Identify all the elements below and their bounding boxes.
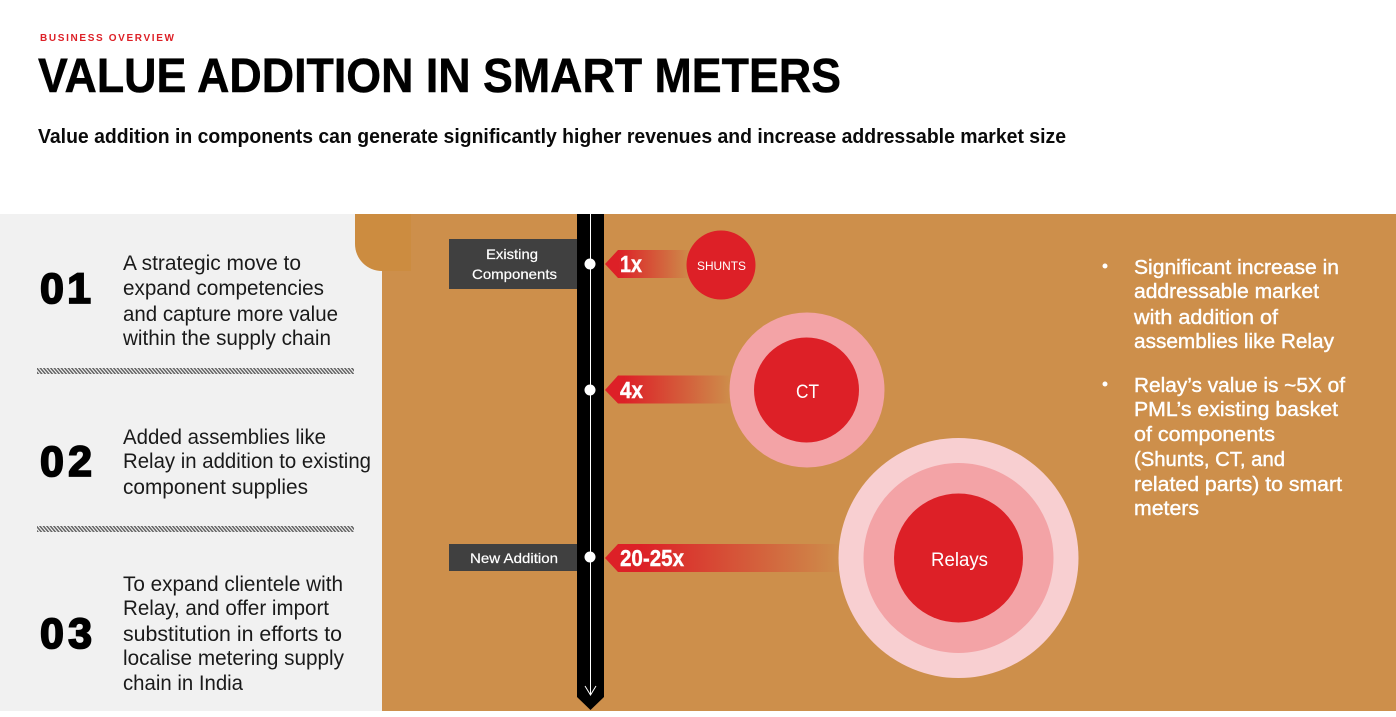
label: existing components [449,239,577,289]
multiplier arrow: 1x: 1x [620,251,642,277]
corner tab [355,214,411,271]
bullet text 1: assemblies like Relay [1134,330,1335,353]
multiplier arrow: 20-25x: 20-25x [620,545,684,571]
point 01: expand competencies [123,277,324,300]
point 02 [40,426,371,499]
label: new addition [449,544,577,571]
label: new addition: New Addition [470,550,558,566]
multiplier arrow: 1x [605,250,692,278]
circle: CT [730,312,884,468]
multiplier arrow: 20-25x [605,544,842,572]
label: existing components: Components [472,266,557,282]
bullet text 2: (Shunts, CT, and [1134,448,1285,471]
bullet text 1: addressable market [1134,280,1319,303]
panel: left points [0,214,382,711]
point 03: To expand clientele with [123,573,343,596]
eyebrow: BUSINESS OVERVIEW [40,33,175,44]
bullet text 2: related parts) to smart [1134,473,1342,496]
point 03 [40,573,344,695]
bullet text 2: meters [1134,497,1199,520]
point 03: 03 [40,610,92,658]
point 03: chain in India [123,672,243,695]
bullet text 1: Significant increase in [1134,256,1339,279]
multiplier arrow: 4x: 4x [620,377,643,403]
circle: shunts [686,230,756,300]
point 01 [40,252,338,350]
circle: shunts: SHUNTS [697,259,746,273]
circle: relays: Relays [931,550,988,571]
point 01: A strategic move to [123,252,301,275]
point 03: substitution in efforts to [123,623,342,646]
bullet text 2: of components [1134,423,1275,446]
bullet text 2: Relay’s value is ~5X of [1134,374,1345,397]
point 03: Relay, and offer import [123,597,329,620]
circle: relays [838,438,1078,678]
title: VALUE ADDITION IN SMART METERS [38,50,841,103]
point 03: localise metering supply [123,647,344,670]
bullet text 2: PML’s existing basket [1134,398,1338,421]
bullet text 2 [1102,374,1345,520]
label: existing components: Existing [486,246,538,262]
subtitle: Value addition in components can generate significantly higher revenues and increase addressable market size [38,125,1066,148]
point 01: within the supply chain [122,327,331,350]
multiplier arrow: 4x [605,376,732,404]
panel: value chart [355,214,1396,711]
bullet text 1: with addition of [1133,306,1278,329]
point 01: 01 [40,265,91,313]
circle: CT: CT [796,382,819,403]
point 02: Relay in addition to existing [123,450,371,473]
point 01: and capture more value [123,303,338,326]
point 02: component supplies [123,476,308,499]
bullet text 1 [1102,256,1339,353]
point 02: Added assemblies like [123,426,326,449]
timeline arrow [577,214,604,710]
point 02: 02 [40,438,92,486]
